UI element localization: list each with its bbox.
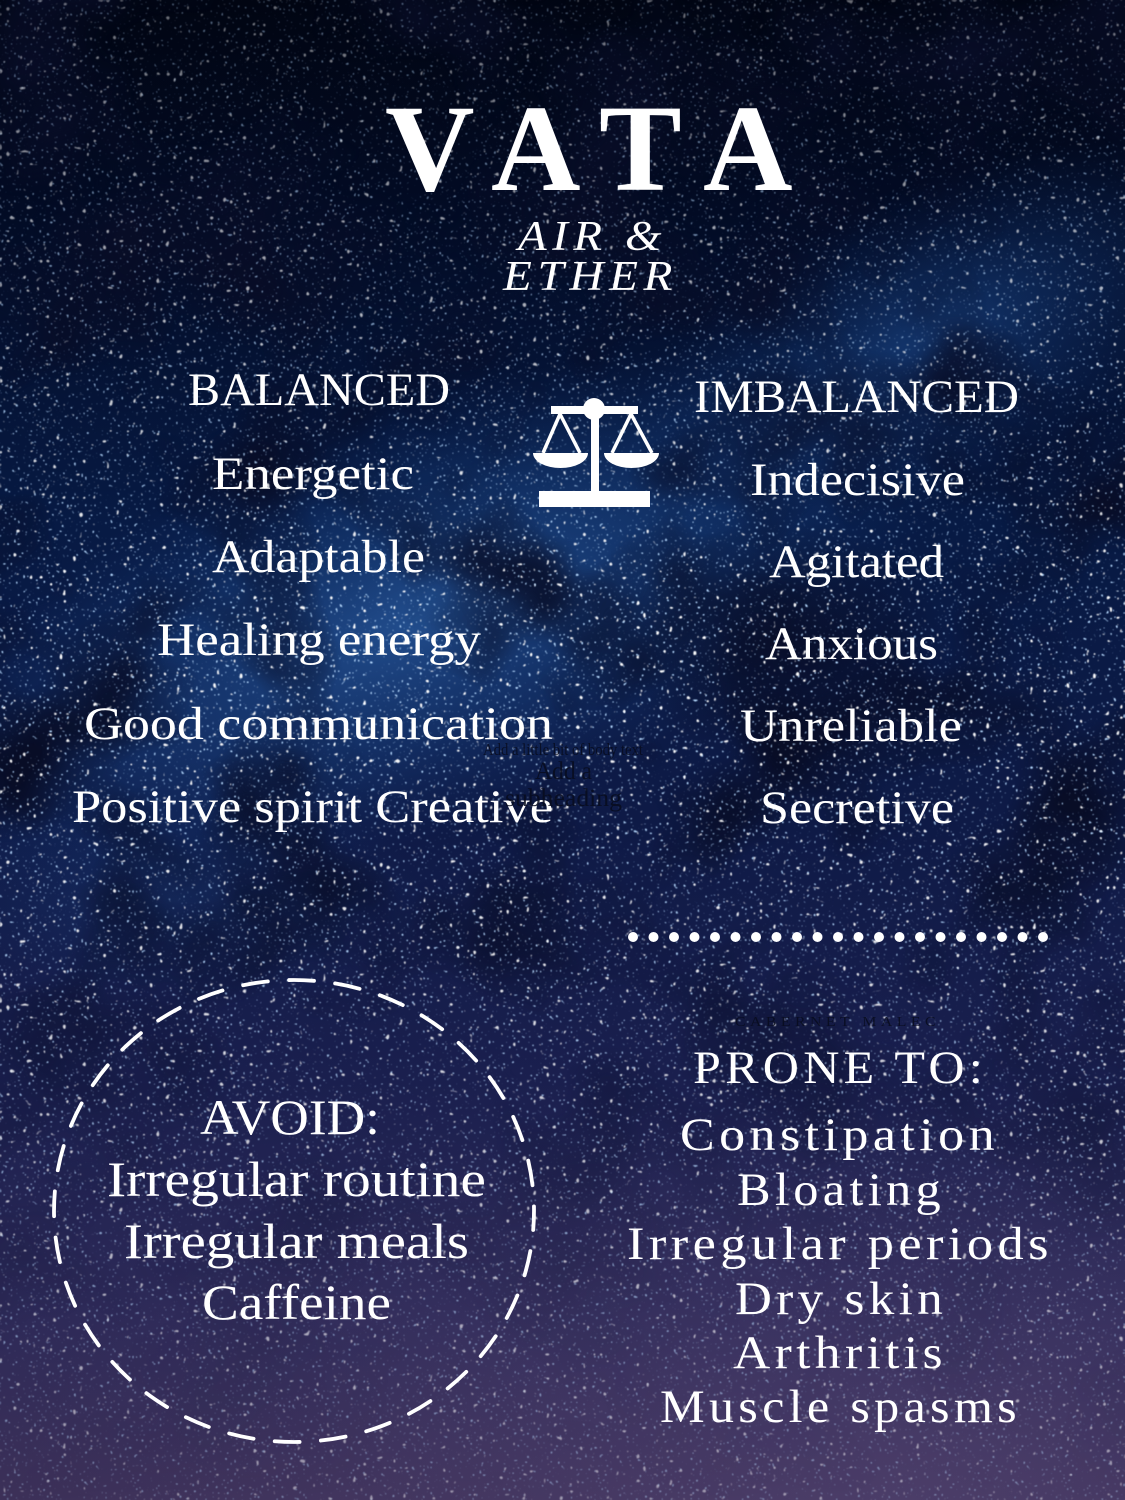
- imbalanced list: Secretive: [760, 782, 954, 834]
- imbalanced list: Anxious: [765, 618, 938, 670]
- imbalanced list: Agitated: [769, 536, 944, 588]
- heading: prone to: PRONE TO:: [693, 1042, 987, 1094]
- prone to list: Dry skin: [735, 1273, 947, 1325]
- panel: balanced: [72, 364, 553, 833]
- balanced list: Positive spirit Creative: [72, 781, 553, 833]
- prone to list: [627, 1109, 1053, 1433]
- panel: prone to: [627, 1042, 1053, 1433]
- balanced list: [72, 448, 553, 833]
- avoid list: Irregular meals: [124, 1213, 469, 1269]
- prone to list: Constipation: [680, 1109, 999, 1161]
- icon: balance scales: [533, 398, 659, 507]
- panel: avoid: [107, 1089, 486, 1330]
- placeholder text: dark: subheading: [505, 785, 623, 812]
- imbalanced list: [740, 454, 965, 834]
- heading: imbalanced: IMBALANCED: [694, 371, 1019, 423]
- dashed circle: [54, 980, 534, 1442]
- title: VATA: [385, 80, 793, 217]
- avoid list: Irregular routine: [107, 1151, 486, 1207]
- avoid list: [107, 1151, 486, 1330]
- placeholder text: dark: Add a little bit of body text: [483, 740, 643, 759]
- imbalanced list: Indecisive: [750, 454, 965, 506]
- prone to list: Bloating: [737, 1164, 945, 1216]
- balanced list: Healing energy: [157, 614, 482, 666]
- placeholder text: dark: [483, 740, 643, 812]
- heading: avoid: AVOID:: [200, 1089, 380, 1145]
- balanced list: Good communication: [84, 698, 553, 750]
- prone to list: Irregular periods: [627, 1218, 1053, 1270]
- prone to list: Arthritis: [733, 1327, 947, 1379]
- subtitle: [502, 214, 678, 300]
- panel: imbalanced: [694, 371, 1019, 834]
- placeholder text: dark: Add a: [535, 758, 592, 785]
- prone to list: Muscle spasms: [660, 1381, 1021, 1433]
- dotted divider: [628, 932, 1048, 942]
- subtitle: AIR &: [515, 214, 667, 260]
- heading: balanced: BALANCED: [188, 364, 450, 416]
- balanced list: Adaptable: [212, 531, 425, 583]
- imbalanced list: Unreliable: [740, 700, 962, 752]
- avoid list: Caffeine: [202, 1274, 391, 1330]
- small brand label: CABERNET MALEC: [735, 1015, 940, 1030]
- subtitle: ETHER: [502, 254, 678, 300]
- balanced list: Energetic: [212, 448, 414, 500]
